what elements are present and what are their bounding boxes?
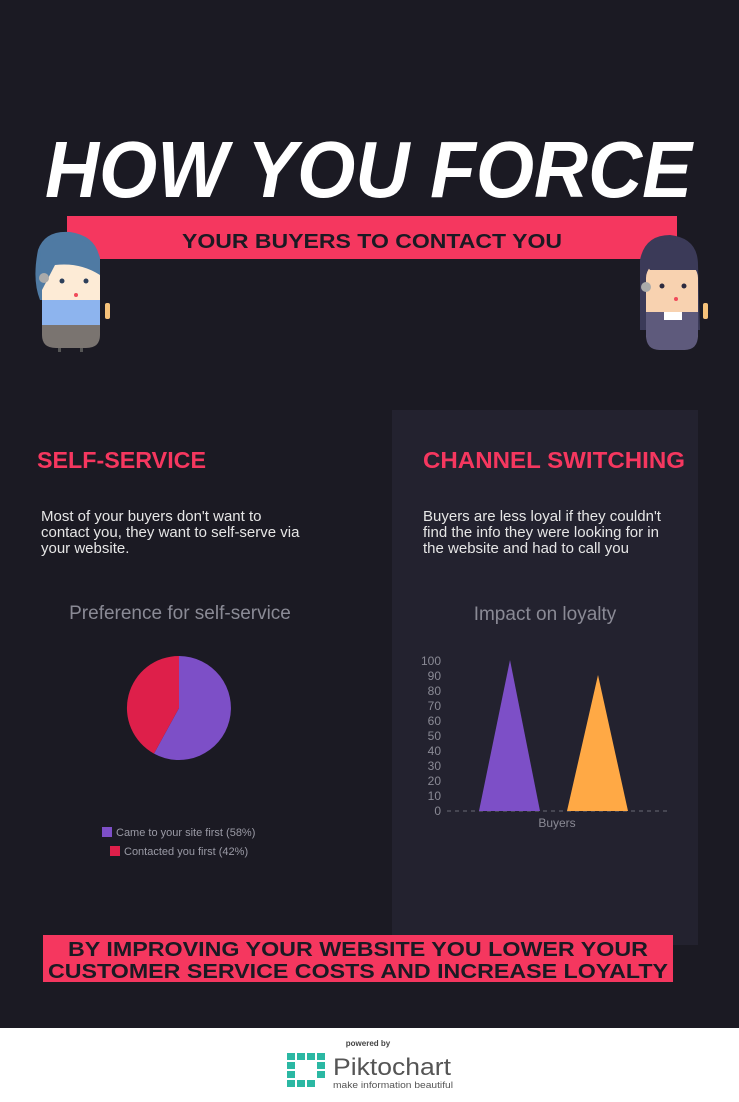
bottom banner: CUSTOMER SERVICE COSTS AND INCREASE LOYALTY xyxy=(48,961,669,983)
bar chart: 10 xyxy=(428,789,441,803)
bottom banner: BY IMPROVING YOUR WEBSITE YOU LOWER YOUR xyxy=(68,939,649,961)
heading: self-service: SELF-SERVICE xyxy=(37,447,206,473)
text block: channel switching: find the info they were looking for in xyxy=(423,524,659,541)
bar chart: 50 xyxy=(428,729,441,743)
text block: channel switching: the website and had to call you xyxy=(423,540,629,557)
text block: self-service: contact you, they want to self-serve via xyxy=(41,524,300,541)
bar chart xyxy=(421,654,668,830)
footer: make information beautiful xyxy=(333,1080,453,1090)
legend xyxy=(102,827,255,858)
title: HOW YOU FORCE xyxy=(45,125,694,214)
pie chart xyxy=(127,656,231,760)
bar chart: 80 xyxy=(428,684,441,698)
chart title: loyalty: Impact on loyalty xyxy=(474,604,617,625)
subtitle banner xyxy=(67,216,677,259)
icon: agent right xyxy=(640,235,708,350)
bar chart: 100 xyxy=(421,654,441,668)
bar chart: 90 xyxy=(428,669,441,683)
bar chart: 0 xyxy=(434,804,441,818)
footer: Piktochart xyxy=(333,1054,451,1081)
chart title: preference: Preference for self-service xyxy=(69,603,291,624)
bar chart: 70 xyxy=(428,699,441,713)
subtitle banner: YOUR BUYERS TO CONTACT YOU xyxy=(182,231,562,253)
bar chart: 40 xyxy=(428,744,441,758)
legend: Contacted you first (42%) xyxy=(124,846,248,858)
heading: channel switching: CHANNEL SWITCHING xyxy=(423,447,685,473)
icon: agent left xyxy=(35,232,110,352)
bar chart: 60 xyxy=(428,714,441,728)
bar chart: 30 xyxy=(428,759,441,773)
text block: channel switching: Buyers are less loyal if they couldn't xyxy=(423,508,662,525)
footer xyxy=(0,1028,739,1102)
bottom banner xyxy=(43,935,673,983)
text block: self-service: your website. xyxy=(41,540,129,557)
legend: Came to your site first (58%) xyxy=(116,827,255,839)
bar chart: 20 xyxy=(428,774,441,788)
bar chart: Buyers xyxy=(538,816,576,830)
panel: channel switching background xyxy=(392,410,698,945)
footer: powered by xyxy=(346,1039,391,1048)
text block: self-service: Most of your buyers don't want to xyxy=(41,508,261,525)
